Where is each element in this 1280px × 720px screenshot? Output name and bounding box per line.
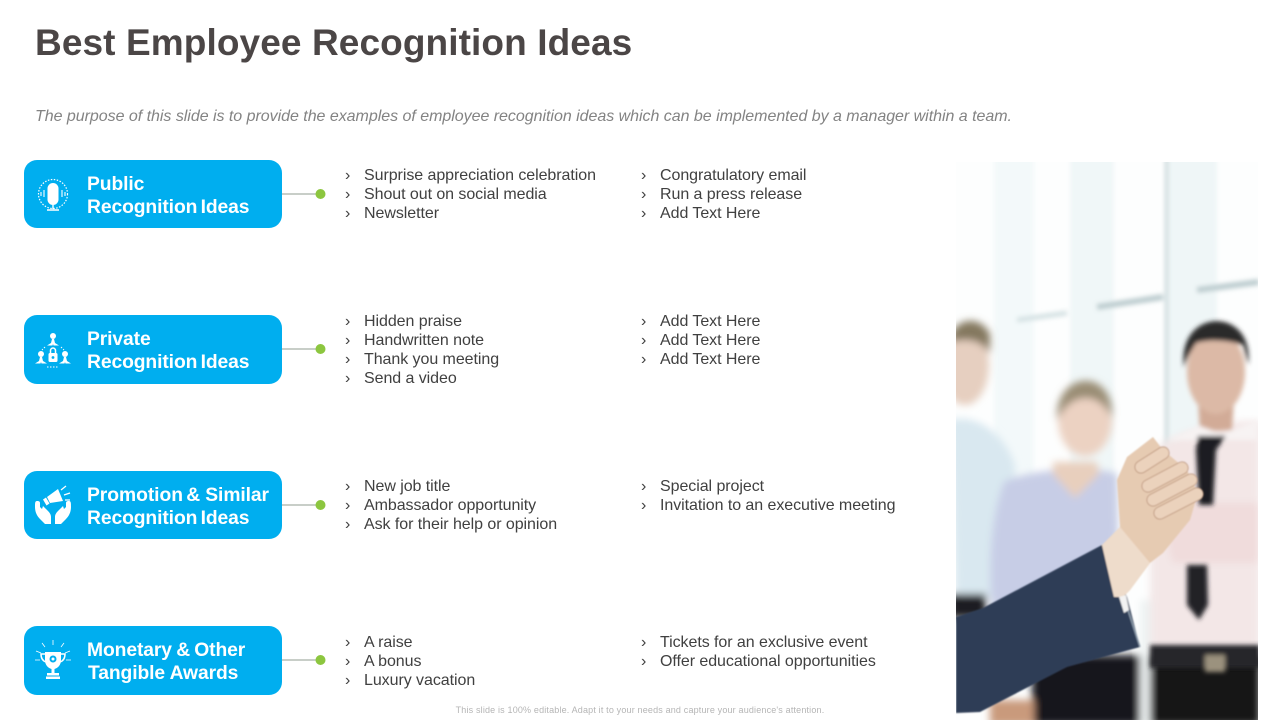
list: promotion column one: Ask for their help or opinion: [364, 516, 557, 533]
list: monetary column one: A bonus: [364, 653, 421, 670]
panel: private recognition header: [24, 315, 282, 384]
label: monetary and other tangible awards: Tangible Awards: [88, 663, 238, 684]
label: public recognition ideas: Public: [87, 174, 144, 195]
list: monetary column two: [641, 634, 876, 670]
arm and fist: [956, 437, 1198, 713]
list: monetary column two: ›: [641, 653, 646, 670]
list: promotion column one: [345, 478, 557, 533]
list: public column two: ›: [641, 205, 646, 222]
label: private recognition ideas: [87, 329, 249, 373]
subtitle description: The purpose of this slide is to provide the examples of employee recognition ideas which can be implemented by a manager within a team.: [35, 108, 1012, 125]
list: public column one: ›: [345, 167, 350, 184]
list: public column two: [641, 167, 806, 222]
footer note: This slide is 100% editable. Adapt it to your needs and capture your audience's attention.: [456, 705, 824, 715]
list: public column one: ›: [345, 205, 350, 222]
label: promotion and similar recognition ideas: Promotion & Similar: [87, 485, 269, 506]
list: promotion column one: ›: [345, 478, 350, 495]
photo: team watching a raised fist: [956, 162, 1258, 720]
panel: promotion recognition header: [24, 471, 282, 539]
list: public column one: Shout out on social media: [364, 186, 547, 203]
list: public column two: Congratulatory email: [660, 167, 806, 184]
left man: [941, 325, 989, 405]
list: monetary column one: ›: [345, 672, 350, 689]
list: private column one: ›: [345, 370, 350, 387]
list: promotion column one: New job title: [364, 478, 450, 495]
list: private column two: Add Text Here: [660, 313, 760, 330]
list: public column one: [345, 167, 596, 222]
list: monetary column one: [345, 634, 475, 689]
label: promotion and similar recognition ideas: Recognition Ideas: [87, 508, 249, 529]
list: promotion column two: Invitation to an executive meeting: [660, 497, 895, 514]
list: private column one: ›: [345, 313, 350, 330]
list: private column one: Hidden praise: [364, 313, 462, 330]
list: private column two: [641, 313, 760, 368]
list: private column one: ›: [345, 332, 350, 349]
connector: public: [282, 189, 326, 199]
list: private column one: Handwritten note: [364, 332, 484, 349]
list: private column one: ›: [345, 351, 350, 368]
list: private column two: Add Text Here: [660, 332, 760, 349]
icon: people with padlock: [35, 333, 71, 368]
list: monetary column one: ›: [345, 634, 350, 651]
list: public column one: Newsletter: [364, 205, 439, 222]
list: public column two: Run a press release: [660, 186, 802, 203]
list: public column two: ›: [641, 167, 646, 184]
panel: public recognition header: [24, 160, 282, 228]
icon: trophy: [35, 640, 71, 679]
label: private recognition ideas: Recognition Ideas: [87, 352, 249, 373]
list: promotion column two: Special project: [660, 478, 764, 495]
list: private column two: Add Text Here: [660, 351, 760, 368]
list: public column two: Add Text Here: [660, 205, 760, 222]
right man head: [1198, 400, 1234, 432]
connector: monetary: [282, 655, 326, 665]
label: promotion and similar recognition ideas: [87, 485, 269, 529]
list: private column two: ›: [641, 313, 646, 330]
belt: [1150, 645, 1260, 668]
list: promotion column two: ›: [641, 478, 646, 495]
list: private column one: Send a video: [364, 370, 457, 387]
label: monetary and other tangible awards: [87, 640, 245, 684]
list: monetary column two: Tickets for an exclusive event: [660, 634, 867, 651]
list: public column two: ›: [641, 186, 646, 203]
label: public recognition ideas: [87, 174, 249, 218]
list: promotion column two: [641, 478, 895, 514]
list: monetary column one: Luxury vacation: [364, 672, 475, 689]
list: promotion column one: ›: [345, 516, 350, 533]
tie: [1196, 436, 1226, 505]
list: private column two: ›: [641, 332, 646, 349]
list: public column one: ›: [345, 186, 350, 203]
list: monetary column two: ›: [641, 634, 646, 651]
list: promotion column one: Ambassador opportunity: [364, 497, 536, 514]
icon: microphone: [38, 178, 68, 211]
icon: megaphone in hands: [35, 486, 71, 524]
right man body: [1150, 421, 1260, 650]
list: promotion column one: ›: [345, 497, 350, 514]
connector: promotion: [282, 500, 326, 510]
panel: monetary awards header: [24, 626, 282, 695]
list: monetary column two: Offer educational opportunities: [660, 653, 876, 670]
list: private column one: [345, 313, 499, 387]
label: public recognition ideas: Recognition Ideas: [87, 197, 249, 218]
connector: private: [282, 344, 326, 354]
list: public column one: Surprise appreciation celebration: [364, 167, 596, 184]
label: private recognition ideas: Private: [87, 329, 151, 350]
list: private column two: ›: [641, 351, 646, 368]
list: monetary column one: ›: [345, 653, 350, 670]
title: Best Employee Recognition Ideas: [35, 22, 632, 63]
list: promotion column two: ›: [641, 497, 646, 514]
list: private column one: Thank you meeting: [364, 351, 499, 368]
label: monetary and other tangible awards: Monetary & Other: [87, 640, 245, 661]
list: monetary column one: A raise: [364, 634, 412, 651]
woman: [990, 469, 1119, 637]
